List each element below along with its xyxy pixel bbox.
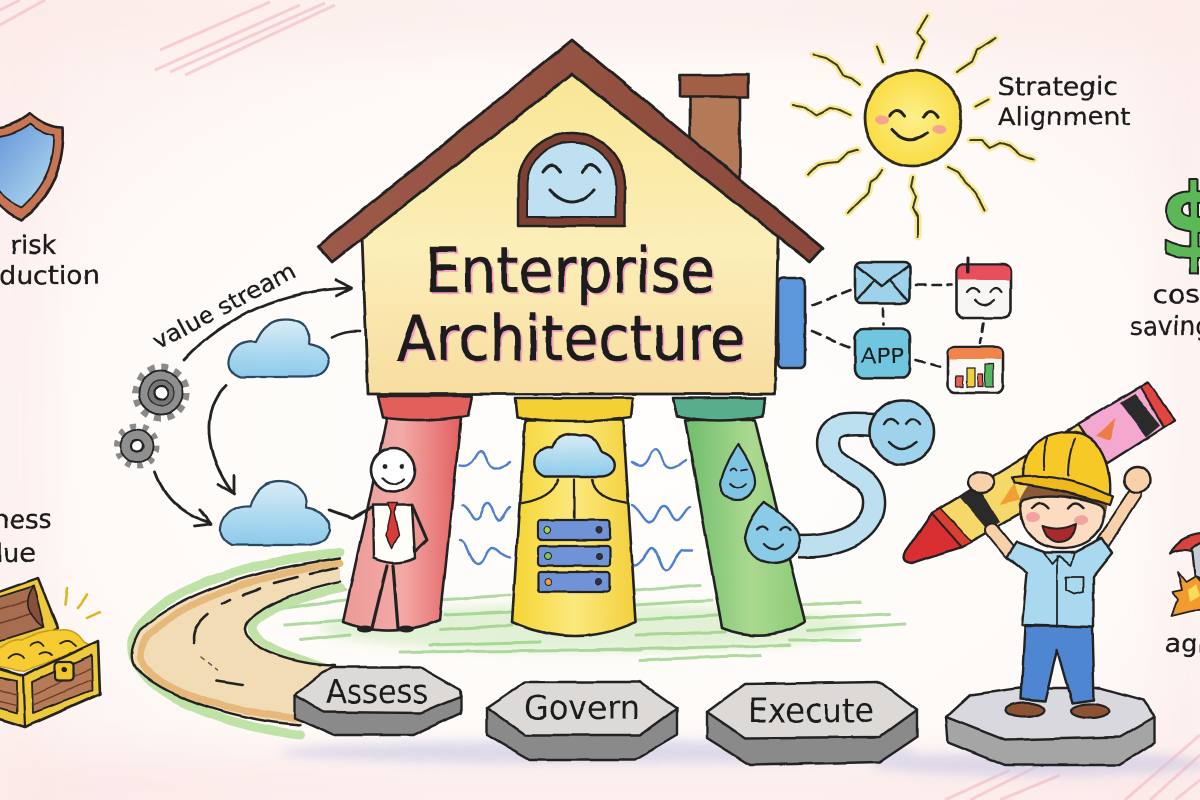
stone: worker base bbox=[946, 688, 1155, 765]
arrow: cloud to cloud bbox=[209, 385, 234, 494]
label: strategic alignment: Alignment bbox=[998, 102, 1130, 131]
shadows beneath stones bbox=[280, 740, 1200, 776]
stone: execute bbox=[707, 682, 917, 765]
hair bbox=[1000, 483, 1020, 505]
label: value stream: value stream bbox=[149, 258, 300, 355]
droplet: small bbox=[720, 444, 755, 500]
arrow: gears to cloud bbox=[155, 472, 211, 526]
grass under pillars bbox=[270, 585, 905, 660]
arched window with smile bbox=[518, 133, 625, 226]
icon: calendar bbox=[957, 258, 1011, 318]
title: Enterprise bbox=[425, 234, 715, 307]
head bbox=[1020, 496, 1104, 548]
rocket icon bbox=[1170, 533, 1200, 616]
connector lines bbox=[522, 480, 626, 518]
stone: assess: Assess bbox=[326, 672, 428, 711]
green verges bbox=[132, 552, 340, 735]
chimney bbox=[680, 75, 748, 180]
icon: app: APP bbox=[860, 344, 904, 368]
signal waves: right bbox=[632, 449, 692, 570]
pillar: red bbox=[343, 396, 472, 631]
worker child bbox=[968, 432, 1150, 718]
winding road bbox=[132, 552, 345, 735]
fists bbox=[1124, 467, 1150, 493]
title: Enterprise bbox=[427, 236, 717, 309]
treasure chest bbox=[0, 578, 100, 727]
house wall bbox=[362, 70, 778, 394]
gears bbox=[118, 368, 186, 466]
smiling water head bbox=[870, 400, 934, 464]
stone: assess bbox=[295, 667, 461, 735]
label: business value bbox=[0, 505, 52, 569]
stick man bbox=[330, 448, 427, 632]
title bbox=[397, 234, 747, 377]
arms bbox=[992, 530, 1011, 553]
pillar: yellow bbox=[512, 398, 636, 636]
trousers bbox=[1021, 626, 1094, 703]
signal waves: left bbox=[460, 451, 510, 564]
cloud bbox=[534, 434, 615, 477]
pillar: green bbox=[673, 398, 805, 635]
road surface bbox=[132, 558, 345, 725]
shirt bbox=[1007, 538, 1112, 627]
hard hat bbox=[1023, 432, 1110, 495]
app network bbox=[812, 258, 1011, 393]
gold coins bbox=[0, 630, 90, 672]
icon: chart bbox=[948, 347, 1003, 393]
arrow: value stream to house bbox=[184, 280, 352, 360]
sun bbox=[793, 15, 1033, 237]
blue side panel bbox=[778, 278, 805, 368]
label: risk reduction: risk bbox=[10, 231, 56, 261]
gear: small bbox=[118, 426, 156, 466]
label: cost savings bbox=[1130, 280, 1200, 342]
label: strategic alignment bbox=[998, 72, 1130, 131]
house bbox=[318, 40, 823, 394]
sparkles bbox=[65, 588, 100, 618]
shoes bbox=[1006, 703, 1044, 717]
latch bbox=[55, 662, 73, 681]
icon: app bbox=[855, 329, 910, 378]
label: risk reduction bbox=[0, 231, 100, 291]
water tube bbox=[798, 424, 885, 546]
lid bbox=[0, 578, 58, 668]
connector: cloud to house bbox=[332, 331, 360, 337]
droplet: large bbox=[745, 502, 800, 563]
chest body bbox=[0, 641, 100, 727]
icon: email bbox=[855, 262, 910, 303]
shield icon bbox=[0, 113, 63, 220]
gear: large bbox=[136, 368, 186, 418]
stone: govern bbox=[487, 682, 677, 760]
dashed links bbox=[812, 285, 983, 368]
label: strategic alignment: Strategic bbox=[998, 72, 1118, 101]
server rack bbox=[538, 520, 610, 592]
cloud: lower left bbox=[220, 481, 330, 545]
stone: govern: Govern bbox=[524, 688, 640, 727]
stone: execute: Execute bbox=[748, 691, 874, 730]
cloud: upper left bbox=[228, 319, 329, 377]
cloud and servers on yellow pillar bbox=[522, 434, 626, 592]
title: Architecture bbox=[397, 302, 745, 375]
stepping stones bbox=[280, 667, 1200, 776]
title: Architecture bbox=[399, 304, 747, 377]
roof bbox=[318, 40, 823, 262]
crayon bbox=[904, 383, 1175, 563]
